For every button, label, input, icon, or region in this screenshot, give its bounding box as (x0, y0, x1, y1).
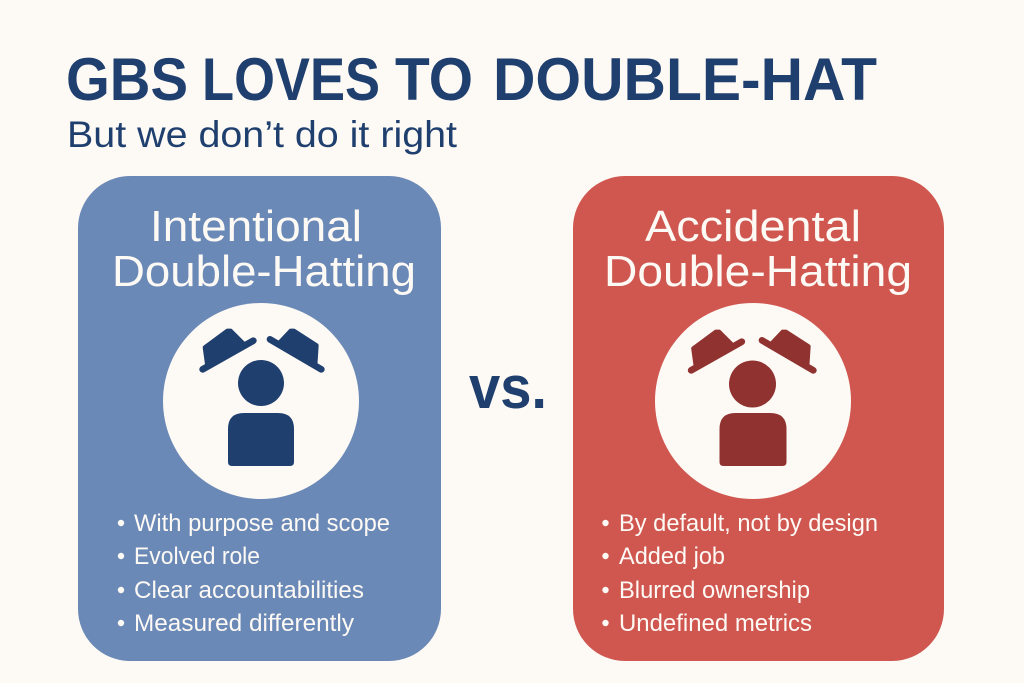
title: LOVES (202, 46, 380, 113)
vs label: vs. (469, 354, 547, 421)
title: DOUBLE-HAT (493, 46, 877, 113)
panel: intentional double-hatting (78, 176, 441, 661)
title (66, 46, 877, 113)
bullet list: Blurred ownership (619, 577, 810, 604)
panel heading (112, 202, 416, 296)
panel heading: Accidental (645, 202, 861, 251)
icon: person with two hats (655, 303, 851, 499)
panel heading: Intentional (150, 202, 362, 251)
bullet list: Evolved role (134, 543, 260, 570)
panel heading: Double-Hatting (604, 247, 912, 296)
bullet list: Undefined metrics (619, 610, 812, 637)
subtitle: But we don’t do it right (67, 114, 458, 155)
panel: accidental double-hatting (573, 176, 944, 661)
bullet list (602, 510, 878, 637)
bullet list (118, 510, 390, 637)
title: GBS (66, 46, 188, 113)
bullet list: Added job (619, 543, 725, 570)
bullet list: Clear accountabilities (134, 577, 364, 604)
bullet list: With purpose and scope (134, 510, 390, 537)
bullet list: By default, not by design (619, 510, 878, 537)
panel background (78, 176, 441, 661)
panel heading: Double-Hatting (112, 247, 416, 296)
panel background (573, 176, 944, 661)
title: TO (395, 46, 473, 113)
bullet list: Measured differently (134, 610, 354, 637)
panel heading (604, 202, 912, 296)
icon: person with two hats (163, 303, 359, 499)
